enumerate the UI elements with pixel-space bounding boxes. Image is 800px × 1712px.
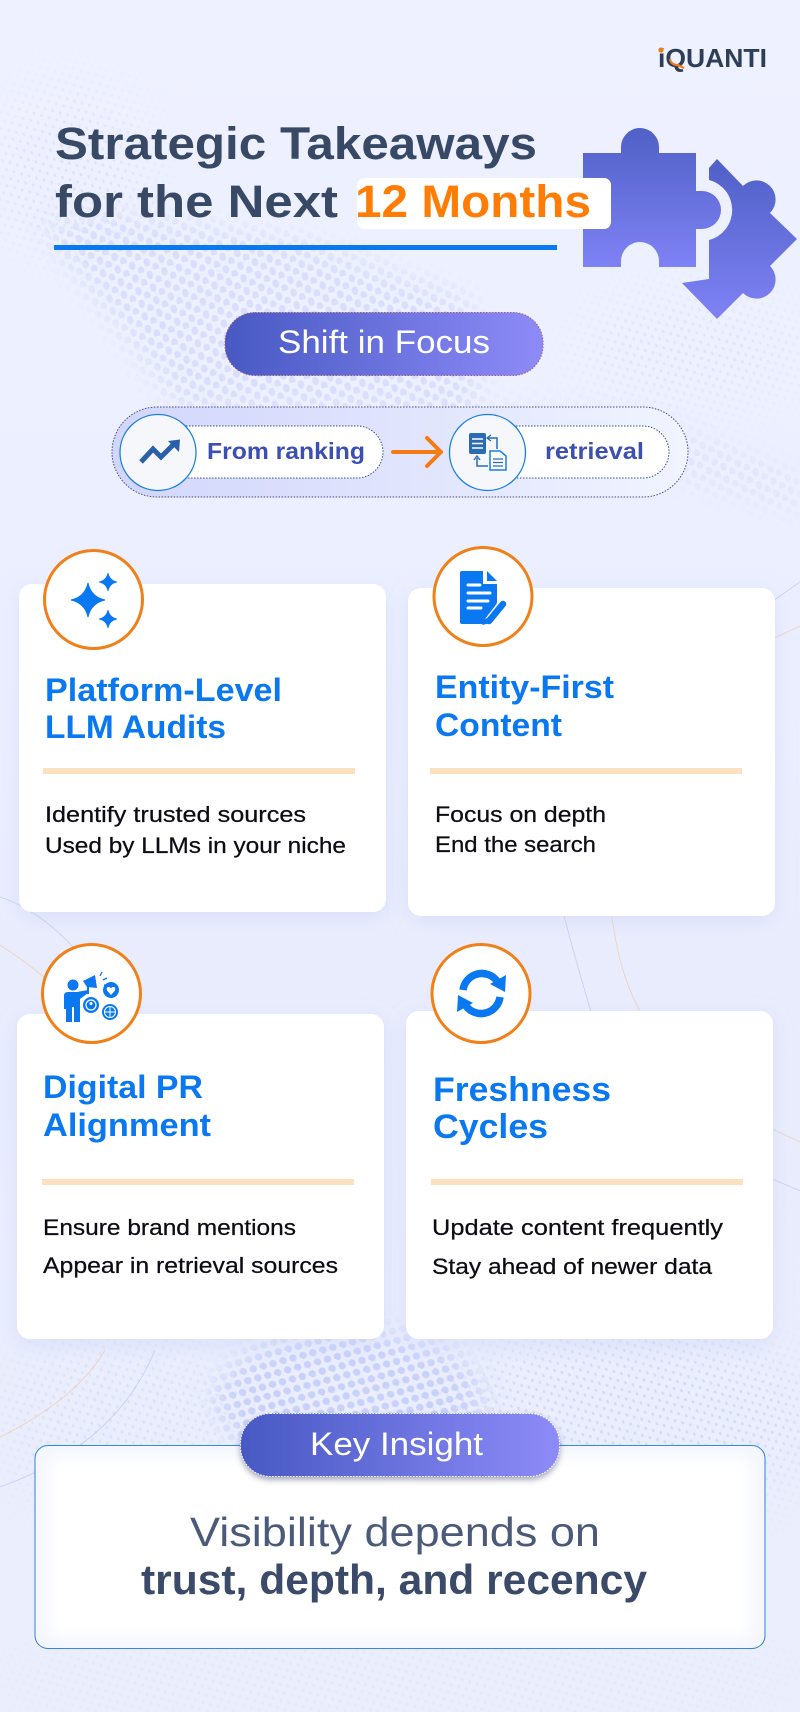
card text: Used by LLMs in your niche (45, 833, 346, 858)
card heading: Digital PR (43, 1069, 203, 1105)
card text (43, 1215, 338, 1278)
arrow (393, 438, 441, 466)
title: 12 Months (355, 176, 591, 227)
icon: document exchange (450, 414, 526, 490)
card text: Update content frequently (432, 1215, 724, 1240)
icon: refresh arrows (432, 944, 530, 1042)
card text: Stay ahead of newer data (432, 1254, 713, 1279)
panel: Platform-Level LLM Audits (19, 550, 386, 912)
title (54, 118, 611, 250)
heading pill: Shift in Focus (225, 312, 543, 376)
insight text: trust, depth, and recency (141, 1556, 648, 1603)
card text (435, 802, 606, 857)
card text: Appear in retrieval sources (43, 1253, 338, 1278)
panel: Freshness Cycles (406, 944, 773, 1339)
icon: sparkles (44, 550, 142, 648)
heading pill: Shift in Focus: Shift in Focus (278, 324, 490, 360)
card text: Focus on depth (435, 802, 606, 827)
title: Strategic Takeaways (55, 118, 537, 169)
pill: from ranking: From ranking (207, 438, 365, 464)
icon: puzzle pieces (583, 128, 797, 319)
card heading (433, 1071, 611, 1146)
icon: person with megaphone (42, 944, 140, 1042)
insight text (141, 1509, 648, 1603)
card text (432, 1215, 724, 1279)
card heading: Platform-Level (45, 672, 282, 708)
icon: trending line (120, 414, 196, 490)
title: for the Next (55, 176, 338, 227)
card heading: Cycles (433, 1108, 548, 1146)
pill: from ranking (160, 426, 383, 478)
card text: Ensure brand mentions (43, 1215, 296, 1240)
card text: Identify trusted sources (45, 802, 306, 827)
panel: Entity-First Content (408, 548, 775, 916)
card heading: Content (435, 707, 562, 743)
panel: key insight (35, 1414, 765, 1648)
pill: retrieval (490, 426, 669, 478)
card heading: Alignment (43, 1107, 211, 1143)
card text: End the search (435, 832, 596, 857)
card heading (435, 669, 614, 743)
card heading (45, 672, 282, 745)
logo: iQUANTI: iQUANTI (658, 43, 767, 73)
card heading (43, 1069, 211, 1143)
panel: from ranking to retrieval (112, 407, 688, 497)
pill: retrieval: retrieval (545, 438, 644, 464)
card heading: LLM Audits (45, 709, 226, 745)
card text (45, 802, 346, 858)
card heading: Freshness (433, 1071, 611, 1109)
panel: Digital PR Alignment (17, 944, 384, 1339)
icon: document with pen (434, 548, 532, 646)
heading pill: Key Insight: Key Insight (310, 1426, 483, 1462)
heading pill: Key Insight (240, 1414, 560, 1476)
insight text: Visibility depends on (190, 1509, 600, 1555)
card heading: Entity-First (435, 669, 614, 705)
